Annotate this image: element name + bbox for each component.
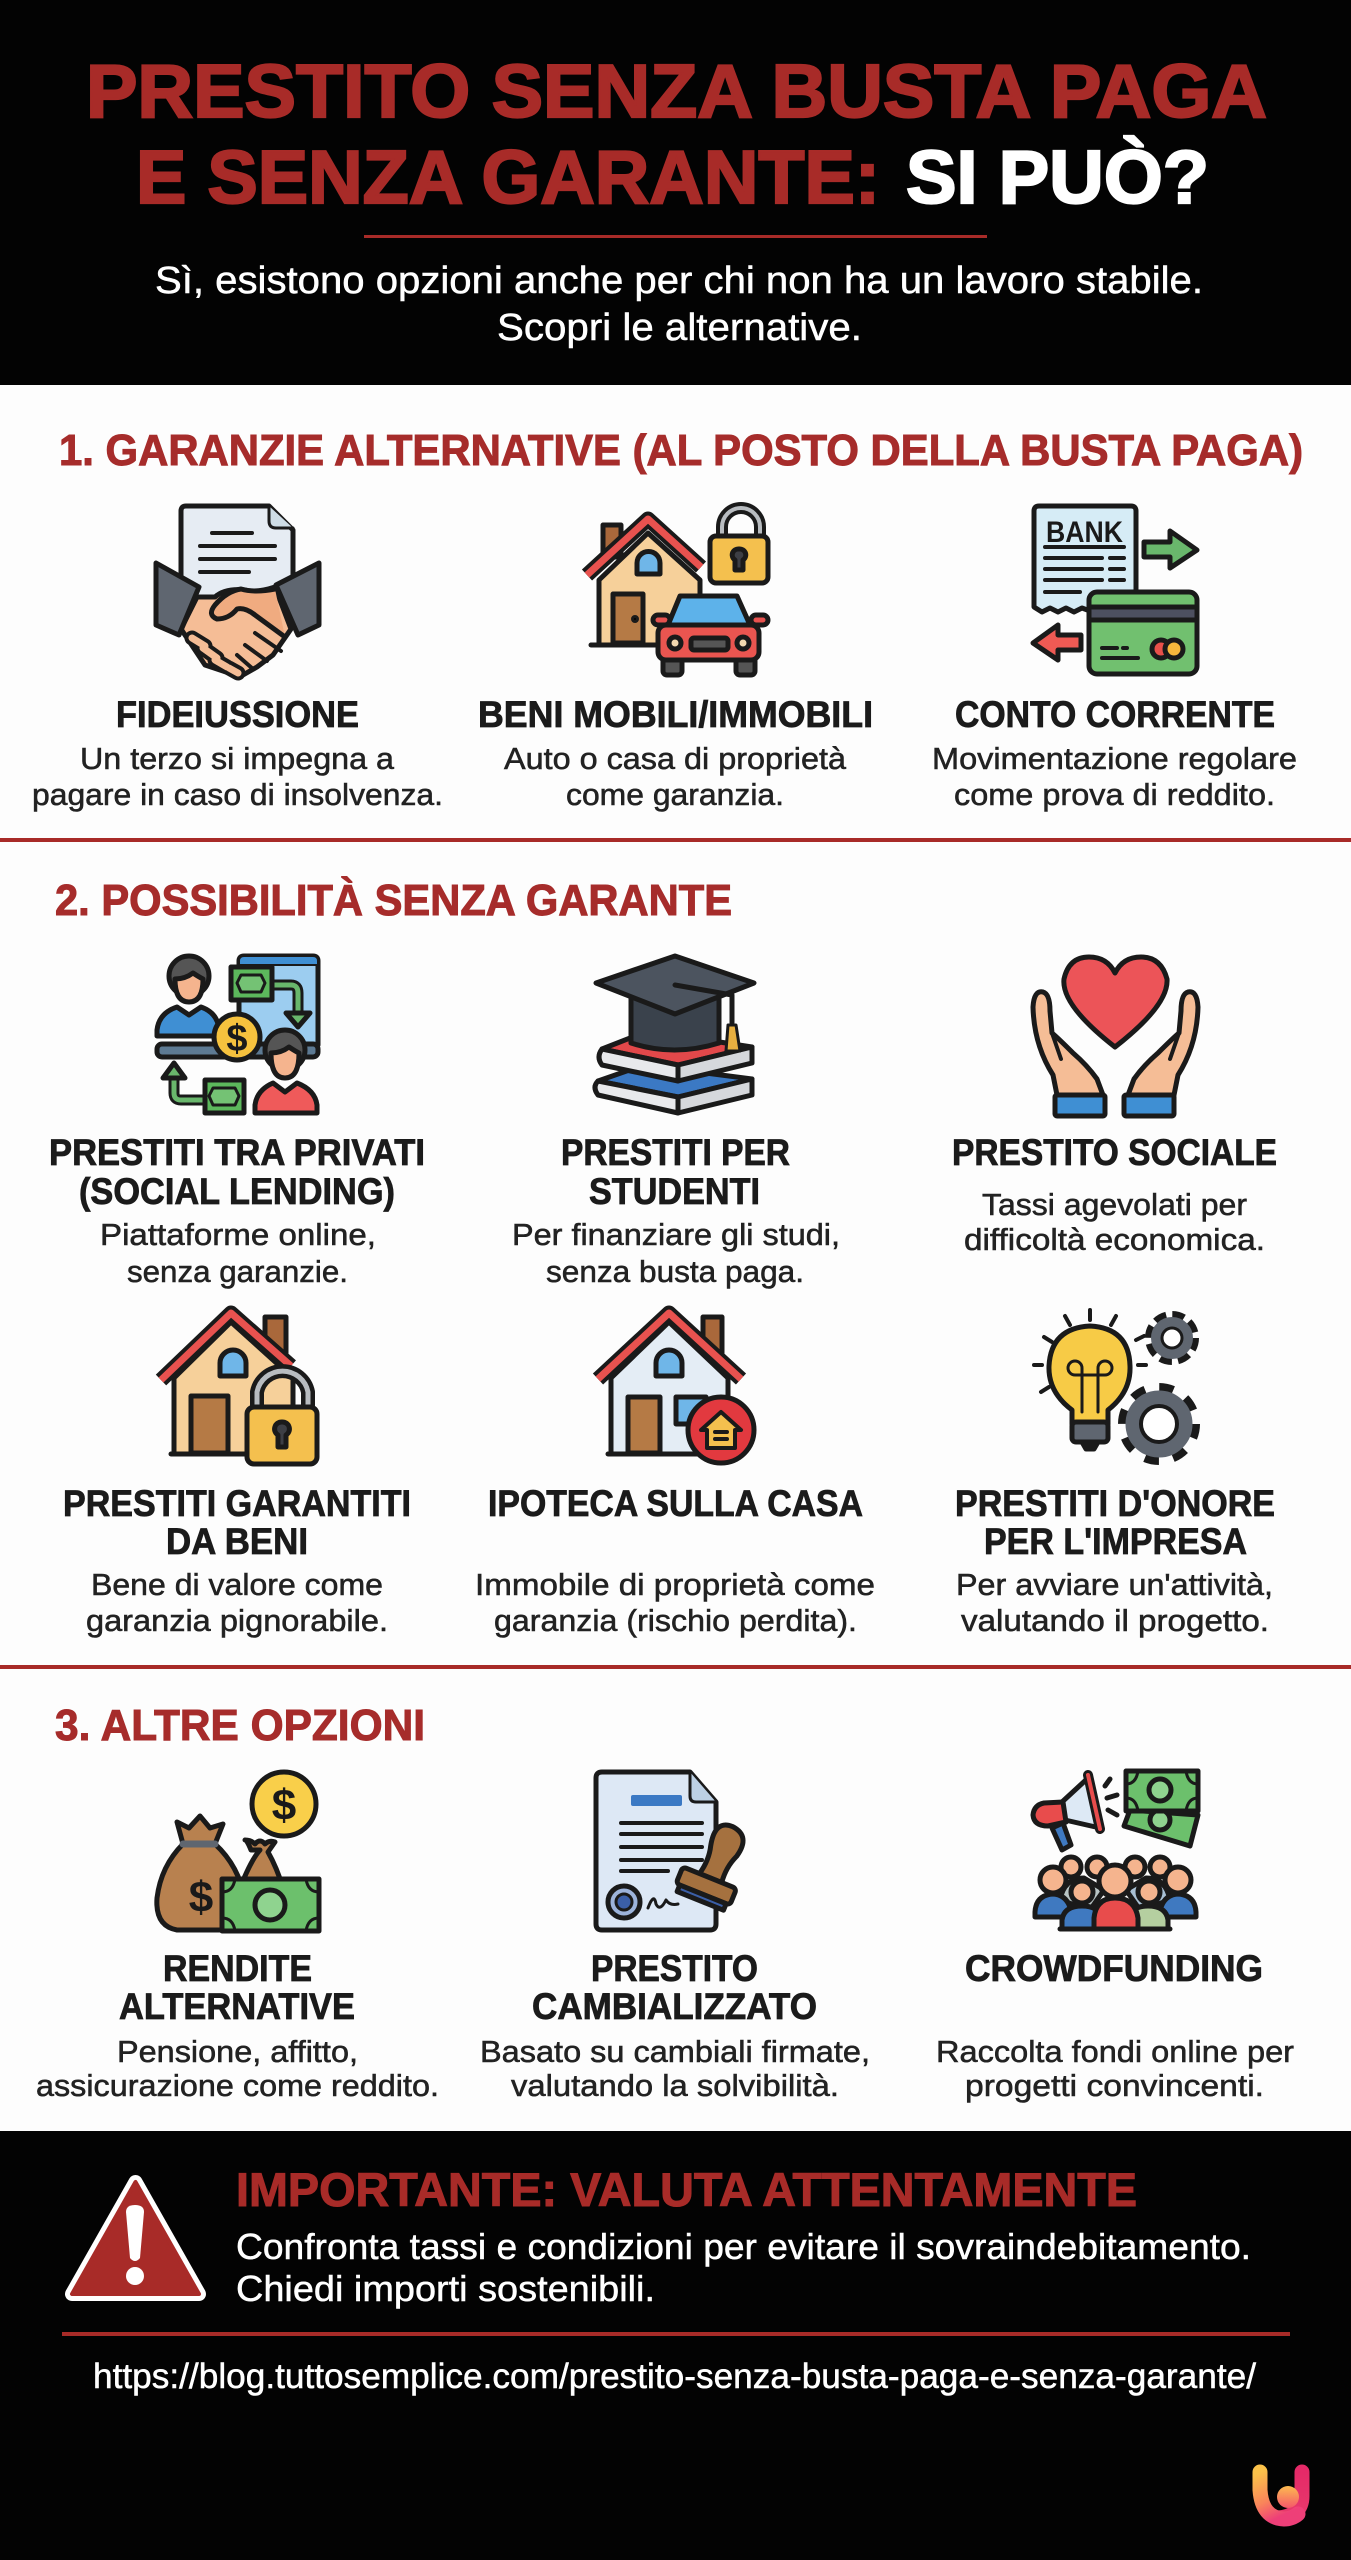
heading: prestiti per studenti xyxy=(561,1132,790,1212)
heading: beni mobili/immobili: BENI MOBILI/IMMOBILI xyxy=(478,694,873,735)
icon: bank statement and credit card: BANK xyxy=(1046,516,1123,549)
icon: money bags coin and banknote: $ xyxy=(189,1873,213,1922)
icon: graduation cap on books xyxy=(595,956,754,1113)
heading: prestito sociale: PRESTITO SOCIALE xyxy=(952,1132,1277,1173)
description: prestito cambializzato xyxy=(480,2034,870,2103)
description: conto corrente xyxy=(932,741,1297,812)
item: prestito sociale xyxy=(952,957,1277,1257)
description: ipoteca sulla casa xyxy=(475,1567,875,1638)
icon: bank statement and credit card xyxy=(1033,506,1197,674)
icon: megaphone money and crowd xyxy=(1033,1771,1198,1929)
subtitle: Scopri le alternative. xyxy=(497,307,862,349)
description: ipoteca sulla casa: Immobile di proprietà come xyxy=(475,1567,875,1602)
item: fideiussione xyxy=(32,506,443,812)
item: ipoteca sulla casa xyxy=(475,1313,875,1638)
description: prestiti per studenti: senza busta paga. xyxy=(546,1254,804,1289)
section 2 heading: 2. POSSIBILITÀ SENZA GARANTE xyxy=(55,875,732,925)
warning heading: IMPORTANTE: VALUTA ATTENTAMENTE xyxy=(236,2163,1137,2216)
icon: lightbulb and gears xyxy=(1034,1310,1194,1458)
description: prestiti garantiti da beni: garanzia pignorabile. xyxy=(86,1603,388,1638)
description: crowdfunding: progetti convincenti. xyxy=(965,2068,1264,2103)
item: rendite alternative xyxy=(36,1772,439,2103)
subtitle: Sì, esistono opzioni anche per chi non ha un lavoro stabile. xyxy=(155,260,1203,302)
item: beni mobili/immobili xyxy=(478,508,873,812)
icon: money bags coin and banknote xyxy=(157,1772,319,1931)
panel: header xyxy=(0,0,1351,385)
description: crowdfunding xyxy=(936,2034,1294,2103)
subtitle xyxy=(155,260,1203,349)
title: SI PUÒ? xyxy=(906,135,1209,219)
heading: prestiti garantiti da beni: PRESTITI GARANTITI xyxy=(63,1483,411,1524)
description: prestiti d'onore per l'impresa xyxy=(956,1567,1273,1638)
description: prestiti per studenti xyxy=(512,1217,840,1289)
description: conto corrente: Movimentazione regolare xyxy=(932,741,1297,776)
icon: hands holding heart xyxy=(1033,957,1198,1116)
warning text xyxy=(236,2226,1251,2309)
description: prestiti garantiti da beni xyxy=(86,1567,388,1638)
heading: prestiti garantiti da beni xyxy=(63,1483,411,1562)
description: beni mobili/immobili: come garanzia. xyxy=(566,777,784,812)
heading: prestiti d'onore per l'impresa: PRESTITI D'ONORE xyxy=(955,1483,1275,1524)
icon: house car and padlock xyxy=(587,508,768,675)
icon: warning triangle xyxy=(72,2182,199,2294)
icon: handshake and document xyxy=(156,506,319,675)
heading: fideiussione: FIDEIUSSIONE xyxy=(116,694,359,735)
description: prestiti d'onore per l'impresa: Per avviare un'attività, xyxy=(956,1567,1273,1602)
heading: prestiti tra privati: (SOCIAL LENDING) xyxy=(79,1171,395,1212)
heading: prestiti tra privati xyxy=(49,1132,425,1212)
description: prestiti per studenti: Per finanziare gli studi, xyxy=(512,1217,840,1252)
heading: ipoteca sulla casa: IPOTECA SULLA CASA xyxy=(488,1483,863,1524)
description: prestiti tra privati xyxy=(100,1217,376,1289)
description: ipoteca sulla casa: garanzia (rischio perdita). xyxy=(494,1603,857,1638)
icon: house with padlock xyxy=(161,1313,317,1464)
description: prestiti tra privati: Piattaforme online, xyxy=(100,1217,376,1252)
heading: prestito cambializzato: CAMBIALIZZATO xyxy=(532,1986,817,2027)
description: prestito sociale: Tassi agevolati per xyxy=(982,1187,1247,1222)
panel: section 2 possibilita senza garante xyxy=(49,875,1277,1638)
title: PRESTITO SENZA BUSTA PAGA xyxy=(86,49,1267,133)
heading: rendite alternative: ALTERNATIVE xyxy=(119,1986,355,2027)
description: fideiussione: Un terzo si impegna a xyxy=(80,741,395,776)
item: prestiti d'onore per l'impresa xyxy=(955,1310,1275,1638)
description: beni mobili/immobili xyxy=(504,741,847,812)
description: beni mobili/immobili: Auto o casa di proprietà xyxy=(504,741,847,776)
description: rendite alternative: Pensione, affitto, xyxy=(117,2034,358,2069)
item: prestiti garantiti da beni xyxy=(63,1313,411,1638)
panel: white content area xyxy=(0,385,1351,2131)
heading: prestiti d'onore per l'impresa xyxy=(955,1483,1275,1562)
item: prestito cambializzato xyxy=(480,1772,870,2103)
heading: prestito cambializzato xyxy=(532,1948,817,2027)
description: rendite alternative: assicurazione come reddito. xyxy=(36,2068,439,2103)
icon: people exchanging money xyxy=(157,956,318,1113)
description: fideiussione: pagare in caso di insolvenza. xyxy=(32,777,443,812)
heading: rendite alternative xyxy=(119,1948,355,2027)
item: crowdfunding xyxy=(936,1771,1294,2103)
warning text: Chiedi importi sostenibili. xyxy=(236,2268,655,2309)
warning text: Confronta tassi e condizioni per evitare il sovraindebitamento. xyxy=(236,2226,1251,2267)
panel: section 1 garanzie alternative xyxy=(32,426,1303,812)
heading: prestito cambializzato: PRESTITO xyxy=(591,1948,758,1989)
description: crowdfunding: Raccolta fondi online per xyxy=(936,2034,1294,2069)
item: prestiti per studenti xyxy=(512,956,840,1289)
icon: money bags coin and banknote: $ xyxy=(272,1781,296,1830)
description: conto corrente: come prova di reddito. xyxy=(954,777,1275,812)
panel: section 3 altre opzioni xyxy=(36,1701,1294,2103)
section 3 heading: 3. ALTRE OPZIONI xyxy=(55,1701,425,1750)
description: fideiussione xyxy=(32,741,443,812)
description: prestito sociale: difficoltà economica. xyxy=(964,1222,1265,1257)
title xyxy=(86,49,1267,219)
description: prestiti tra privati: senza garanzie. xyxy=(127,1254,348,1289)
heading: prestiti garantiti da beni: DA BENI xyxy=(166,1521,308,1562)
heading: rendite alternative: RENDITE xyxy=(163,1948,312,1989)
panel: footer warning xyxy=(0,2131,1351,2560)
title: E SENZA GARANTE: xyxy=(136,135,880,219)
description: prestiti garantiti da beni: Bene di valore come xyxy=(91,1567,383,1602)
item: prestiti tra privati xyxy=(49,956,425,1289)
heading: prestiti per studenti: PRESTITI PER xyxy=(561,1132,790,1173)
heading: prestiti per studenti: STUDENTI xyxy=(589,1171,760,1212)
icon: house with red home badge xyxy=(598,1313,754,1463)
description: rendite alternative xyxy=(36,2034,439,2103)
heading: prestiti tra privati: PRESTITI TRA PRIVATI xyxy=(49,1132,425,1173)
description: prestito sociale xyxy=(964,1187,1265,1257)
icon: people exchanging money: $ xyxy=(226,1018,248,1060)
icon: logo xyxy=(1260,2472,1302,2519)
description: prestito cambializzato: valutando la solvibilità. xyxy=(511,2068,839,2103)
section 1 heading: 1. GARANZIE ALTERNATIVE (AL POSTO DELLA BUSTA PAGA) xyxy=(59,426,1303,475)
heading: crowdfunding: CROWDFUNDING xyxy=(965,1948,1263,1989)
icon: signed document with stamp xyxy=(596,1772,758,1930)
source url: https://blog.tuttosemplice.com/prestito-senza-busta-paga-e-senza-garante/ xyxy=(93,2357,1256,2396)
heading: conto corrente: CONTO CORRENTE xyxy=(955,694,1275,735)
description: prestito cambializzato: Basato su cambiali firmate, xyxy=(480,2034,870,2069)
description: prestiti d'onore per l'impresa: valutando il progetto. xyxy=(961,1603,1269,1638)
item: conto corrente xyxy=(932,506,1297,812)
heading: prestiti d'onore per l'impresa: PER L'IMPRESA xyxy=(984,1521,1247,1562)
